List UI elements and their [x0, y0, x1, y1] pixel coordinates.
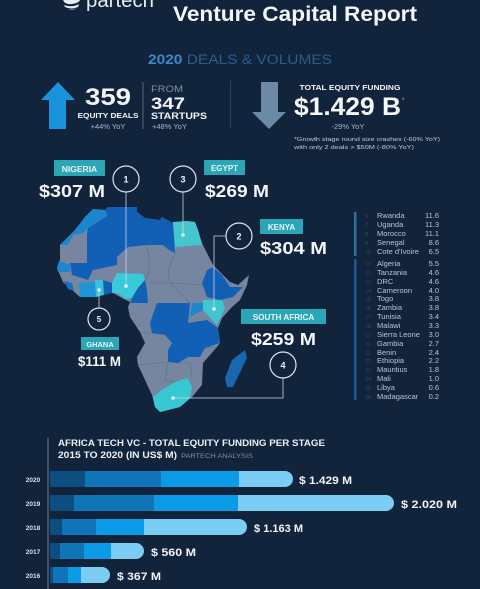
country: Nigeria — [112, 273, 145, 299]
table country names: Madagascar — [377, 392, 419, 401]
continent base — [57, 207, 249, 412]
callout: Nigeria: $307 M — [39, 181, 105, 201]
table values: 6.5 — [429, 247, 439, 256]
panel: total equity funding: $1.429 B — [294, 93, 401, 121]
panel: deals summary — [41, 82, 207, 131]
country: Morocco — [60, 209, 107, 245]
stat: 359 equity deals: 359 — [85, 84, 131, 111]
bar 2018: 2018 — [26, 525, 41, 532]
table country names: Cameroon — [377, 286, 412, 295]
table values: 11.1 — [425, 229, 439, 238]
panel: total equity funding: -29% YoY — [332, 122, 364, 131]
table values: 3.4 — [429, 312, 439, 321]
chart heading: PARTECH ANALYSIS — [181, 454, 253, 460]
table country names: Tunisia — [377, 312, 402, 321]
panel: total equity funding: TOTAL EQUITY FUNDING — [300, 85, 401, 92]
table values: 11.3 — [425, 220, 439, 229]
panel: total equity funding: * — [402, 98, 405, 104]
table country names: Benin — [377, 348, 396, 357]
callout: Ghana: 5 — [97, 315, 102, 324]
table: funding by country — [354, 211, 439, 401]
bar 2016: $ 367 M — [117, 571, 161, 583]
callout: Kenya — [212, 219, 327, 311]
table country names: Zambia — [377, 303, 403, 312]
table values: 3.0 — [429, 330, 439, 339]
country: Madagascar — [225, 350, 247, 387]
table values: 3.8 — [429, 303, 439, 312]
table values — [425, 211, 439, 401]
bar 2020 — [26, 471, 352, 487]
stat: 359 equity deals — [78, 84, 139, 131]
bar 2018: $ 1.163 M — [254, 523, 303, 535]
table rank numbers: 21 — [365, 351, 371, 357]
table values: 5.5 — [429, 259, 439, 268]
icon: up arrow — [41, 82, 75, 129]
table rank numbers: 18 — [365, 324, 371, 330]
table country names: Sierra Leone — [377, 330, 420, 339]
table country names: Senegal — [377, 238, 405, 247]
stat: 347 startups: 347 — [151, 94, 185, 113]
table rank numbers: 15 — [365, 297, 371, 303]
chart heading: AFRICA TECH VC - TOTAL EQUITY FUNDING PER STAGE — [58, 438, 325, 448]
table country names: DRC — [377, 277, 394, 286]
country: north Africa block — [70, 207, 175, 280]
chart axis — [48, 438, 49, 589]
callout: South Africa: 4 — [280, 360, 286, 370]
table values: 0.6 — [429, 383, 439, 392]
table country names: Mauritius — [377, 365, 408, 374]
chart heading — [58, 438, 325, 460]
table rank numbers — [365, 214, 371, 401]
country: Ghana — [95, 280, 104, 297]
callout: Kenya: 2 — [236, 232, 242, 242]
table country names — [377, 211, 420, 401]
callout: Egypt: $269 M — [205, 181, 269, 201]
country: Ivory Coast — [79, 282, 96, 297]
stat: 359 equity deals: EQUITY DEALS — [78, 113, 139, 120]
table rank numbers: 17 — [365, 315, 371, 321]
table country names: Uganda — [377, 220, 404, 229]
table accent bars — [354, 212, 356, 400]
table rank numbers: 23 — [365, 368, 371, 374]
callout: South Africa: SOUTH AFRICA — [253, 313, 314, 322]
table country names: Malawi — [377, 321, 401, 330]
table values: 2.7 — [429, 339, 439, 348]
table values: 3.8 — [429, 294, 439, 303]
table rank numbers: 12 — [365, 271, 371, 277]
table values: 2.2 — [429, 356, 439, 365]
table country names: Algeria — [377, 259, 401, 268]
table country names: Rwanda — [377, 211, 405, 220]
table rank numbers: 16 — [365, 306, 371, 312]
table country names: Togo — [377, 294, 393, 303]
bar 2020: $ 1.429 M — [299, 475, 352, 487]
callout: Egypt — [170, 160, 269, 237]
callout: South Africa — [171, 309, 326, 400]
stat: 359 equity deals: +44% YoY — [91, 122, 125, 131]
stat: 347 startups — [151, 84, 207, 131]
table values: 8.6 — [429, 238, 439, 247]
table values: 4.0 — [429, 286, 439, 295]
table rank numbers: 13 — [365, 280, 371, 286]
table rank numbers: 19 — [365, 333, 371, 339]
divider — [142, 82, 144, 129]
table values: 4.6 — [429, 268, 439, 277]
callout: Kenya: KENYA — [268, 223, 295, 232]
bar 2019: $ 2.020 M — [401, 499, 457, 511]
country: Cameroon — [130, 280, 148, 303]
table country names: Ethiopia — [377, 356, 405, 365]
callout: Nigeria: NIGERIA — [62, 164, 97, 174]
country: Guinea — [64, 281, 74, 291]
panel: total equity funding — [252, 82, 440, 151]
bar 2017: 2017 — [26, 549, 41, 556]
bar 2018 — [26, 519, 303, 535]
callout: Ghana: GHANA — [86, 340, 114, 349]
country: South Africa — [153, 378, 192, 412]
table values: 1.0 — [429, 374, 439, 383]
table rank numbers: 26 — [365, 395, 371, 401]
bar 2017: $ 560 M — [151, 547, 196, 559]
country: Togo and Benin — [103, 280, 112, 295]
borders — [138, 245, 217, 382]
divider — [230, 81, 231, 128]
bar 2016: 2016 — [26, 573, 41, 580]
bar 2019 — [26, 495, 457, 511]
table country names: Cote d'Ivoire — [377, 247, 419, 256]
table rank numbers: 22 — [365, 359, 371, 365]
stat: 347 startups: FROM — [151, 84, 183, 94]
country: Uganda and Rwanda — [190, 303, 203, 317]
bar 2016 — [26, 567, 161, 583]
table values: 0.2 — [429, 392, 439, 401]
callout: Egypt: 3 — [180, 174, 186, 184]
table values: 11.6 — [425, 211, 439, 220]
table values: 2.4 — [429, 348, 439, 357]
section heading: 2020 deals and volumes: 2020 DEALS & VOLUMES — [148, 52, 332, 67]
bar chart: equity funding per stage — [26, 471, 457, 583]
table country names: Morocco — [377, 229, 406, 238]
chart heading: 2015 TO 2020 (IN US$ M) — [58, 450, 177, 460]
callout: Ghana — [78, 288, 121, 369]
panel: total equity funding: with only 2 deals > $50M (-80% YoY) — [293, 145, 414, 151]
table rank numbers: 25 — [365, 386, 371, 392]
country: DRC and neighbours — [150, 303, 220, 363]
table country names: Libya — [377, 383, 396, 392]
country: Kenya — [203, 300, 225, 325]
table country names: Gambia — [377, 339, 404, 348]
table rank numbers: 9 — [365, 241, 368, 247]
callout: Egypt: EGYPT — [211, 164, 238, 173]
table country names: Mali — [377, 374, 391, 383]
country: Egypt — [173, 221, 202, 247]
country: Senegal — [57, 261, 70, 272]
bar 2017 — [26, 543, 196, 559]
table values: 4.6 — [429, 277, 439, 286]
stat: 347 startups: +48% YoY — [152, 122, 187, 131]
title: Venture Capital Report — [173, 3, 417, 26]
bar 2019: 2019 — [26, 501, 41, 508]
table rank numbers: 24 — [365, 377, 371, 383]
table rank numbers: 14 — [365, 289, 371, 295]
table values: 3.3 — [429, 321, 439, 330]
bar 2020: 2020 — [26, 477, 41, 484]
table values: 1.8 — [429, 365, 439, 374]
panel: total equity funding: *Growth stage round size crashes (-60% YoY) — [294, 137, 440, 143]
icon: down arrow — [252, 82, 286, 129]
table rank numbers: 10 — [365, 250, 371, 256]
callout: Kenya: $304 M — [260, 238, 327, 258]
callout: Nigeria: 1 — [123, 174, 129, 184]
callout: South Africa: $259 M — [251, 329, 316, 349]
table rank numbers: 7 — [365, 223, 368, 229]
table rank numbers: 6 — [365, 214, 368, 220]
table rank numbers: 11 — [365, 262, 371, 268]
callout: Ghana: $111 M — [78, 354, 121, 369]
country: Ethiopia — [202, 267, 243, 300]
table rank numbers: 20 — [365, 342, 371, 348]
map of Africa — [57, 207, 249, 412]
table rank numbers: 8 — [365, 232, 368, 238]
callout: Nigeria — [39, 160, 139, 288]
table country names: Tanzania — [377, 268, 408, 277]
stat: 347 startups: STARTUPS — [151, 111, 207, 121]
